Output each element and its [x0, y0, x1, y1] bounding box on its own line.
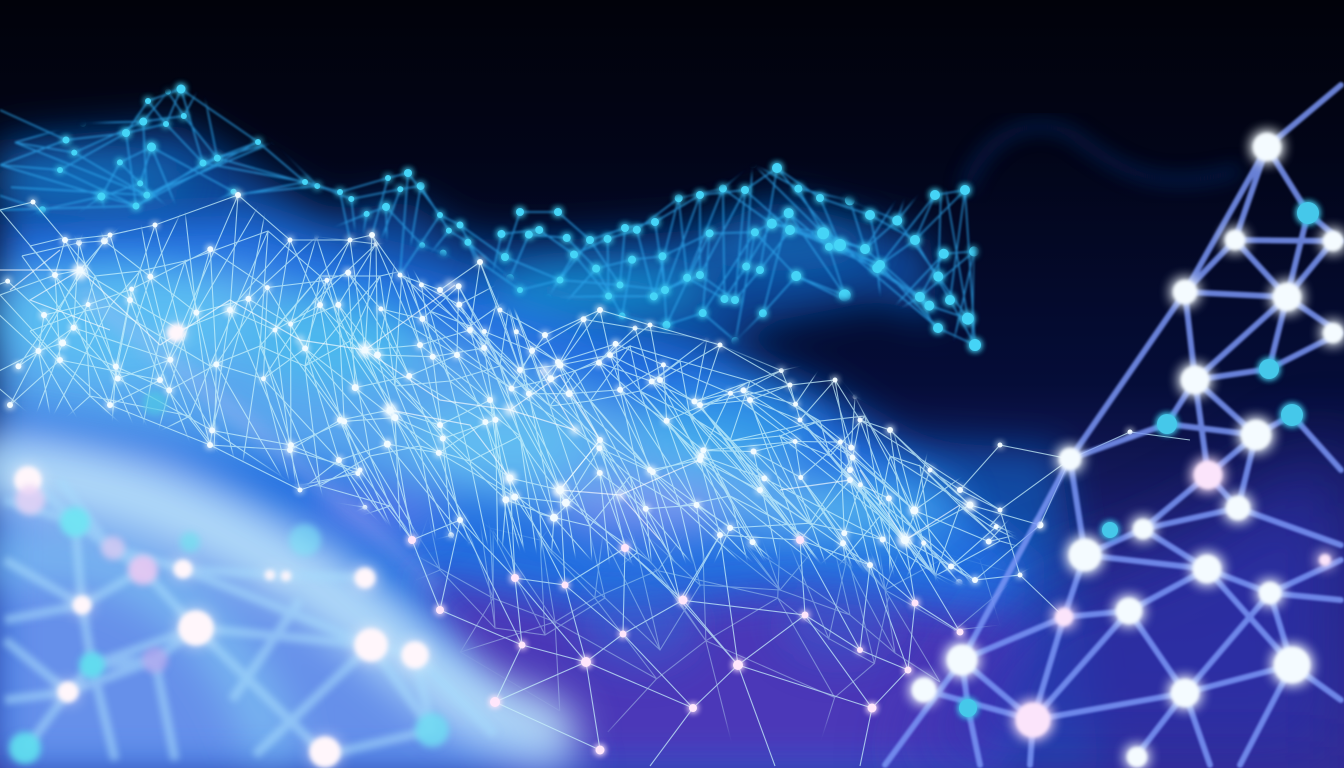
front mesh lines [0, 196, 1190, 766]
bottom-left pink and cyan soft nodes [9, 391, 449, 764]
bottom-left soft field [0, 420, 590, 768]
back mesh lines [0, 88, 977, 344]
bottom-left white nodes [16, 325, 427, 766]
right mesh white nodes [912, 133, 1343, 767]
right mesh colour glow [900, 440, 1344, 768]
front mesh bright highlights [0, 250, 960, 540]
right mesh pink nodes [1016, 461, 1331, 737]
purple lower field [420, 575, 1040, 768]
bottom-left bright arc [0, 470, 545, 738]
back mesh colour field [0, 125, 1100, 768]
front mesh soft node glows [72, 264, 976, 547]
right mesh cyan nodes [959, 202, 1319, 717]
faint wave in the dark background [965, 126, 1240, 190]
bottom-left blurred mesh lines [5, 480, 495, 760]
front mesh white nodes [0, 186, 1138, 588]
front mesh pink nodes [408, 536, 964, 754]
back mesh nodes [36, 79, 986, 356]
diagonal lavender streak [80, 290, 440, 590]
cyan and violet blotches in the central mesh [0, 158, 960, 665]
right foreground mesh lines [885, 85, 1341, 765]
